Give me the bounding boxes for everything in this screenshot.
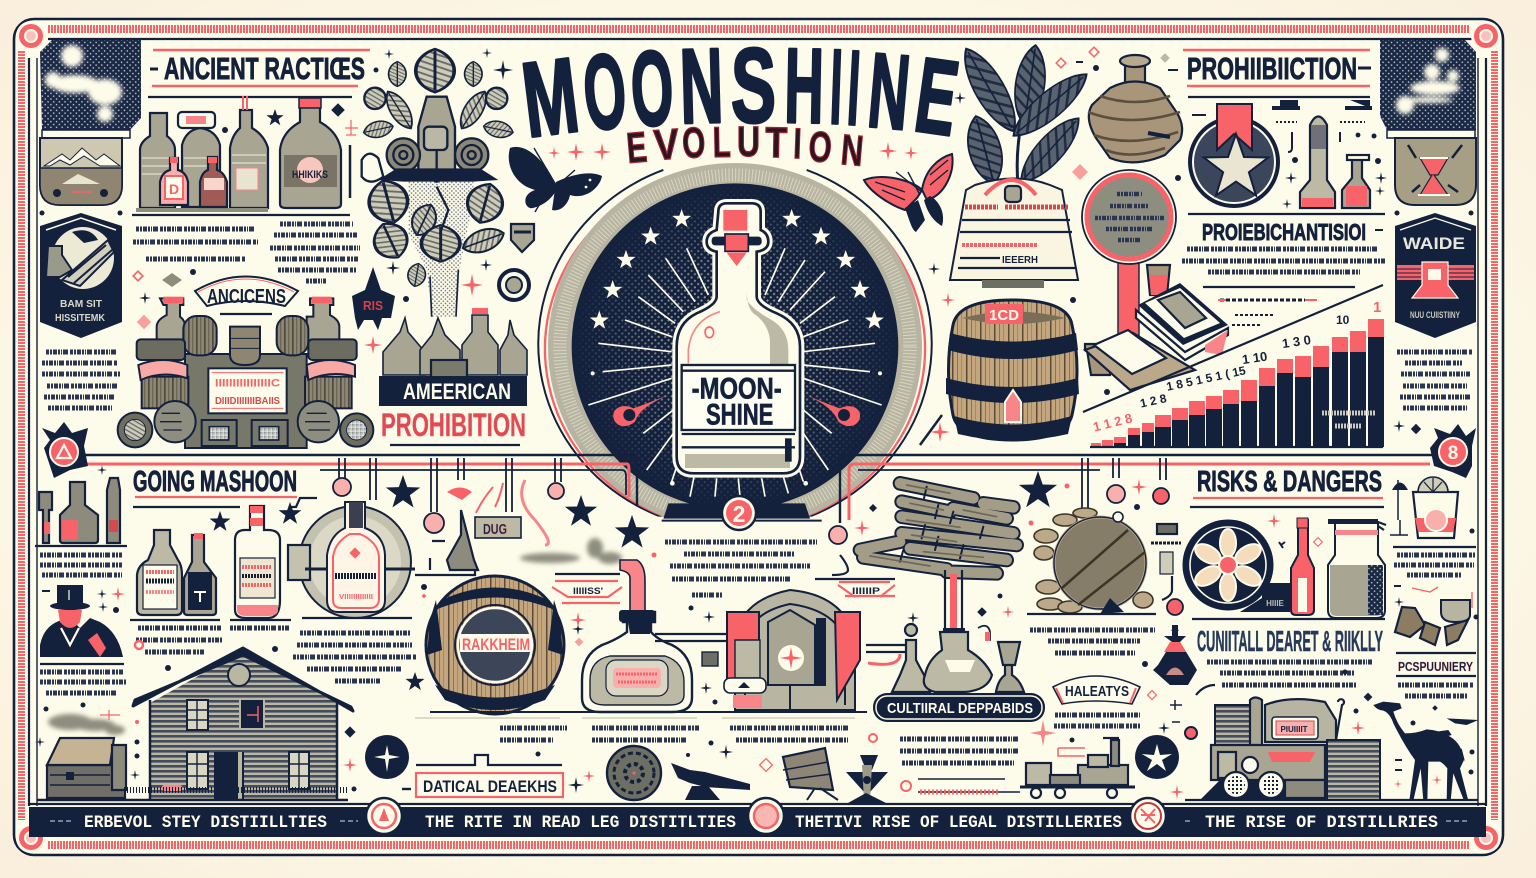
heading: Prohibition: PROHIIBIICTION	[1187, 51, 1357, 86]
banner label 2: THE RITE IN READ LEG DISTITLTIES	[425, 813, 736, 833]
text block: pcspuuniery	[1398, 685, 1474, 696]
panel: American label	[379, 376, 527, 406]
illustration: labelled bottles	[130, 506, 291, 620]
text block: cunhitall	[1207, 662, 1372, 685]
illustration: wooden barrel	[946, 300, 1079, 440]
subtitle: EVOLUTION: O	[681, 119, 706, 168]
text block: man	[40, 672, 126, 693]
text block: left column	[42, 352, 120, 408]
silhouette: camel	[1373, 702, 1478, 801]
bottom banner	[29, 798, 1486, 837]
barrel placard: DIIIDIIIIIIIBAIIS	[215, 396, 280, 407]
banner: Haleatys: HALEATYS	[1065, 683, 1129, 700]
corner ornament: bottom left	[16, 823, 46, 853]
small ornaments	[133, 48, 513, 354]
panel: top-left sky	[40, 40, 141, 205]
title: MOONSHINE: S	[731, 27, 776, 145]
illustration: American Prohibition: AMEERICAN	[403, 379, 511, 404]
illustration: cultural flasks	[892, 624, 1024, 692]
banner label 3: THETIVI RISE OF LEGAL DISTILLERIES	[795, 813, 1122, 833]
chips and cup	[1394, 586, 1478, 645]
icon: wagon wheel	[607, 746, 661, 800]
pipe pendants	[333, 458, 1183, 615]
bar chart	[1083, 285, 1384, 447]
sunburst rays	[588, 248, 882, 497]
chart value labels: 1 10	[1241, 349, 1268, 367]
medallion base	[662, 503, 822, 521]
chart value labels: 1 1 2 8	[1092, 410, 1134, 435]
heading: Ancient Practices: ANCIENT RACTIŒS	[164, 51, 365, 86]
butterfly right	[864, 154, 953, 232]
banner medallion 2	[748, 798, 784, 834]
title: MOONSHINE: O	[579, 32, 631, 153]
barrel placard: IIIIIIIIIIIIIIIIC	[215, 378, 280, 390]
pill: Cultural Deppabids: CULTIIRAL DEPPABIDS	[887, 700, 1033, 717]
coral comets	[613, 393, 860, 426]
heading: Risks and Dangers: RISKS & DANGERS	[1197, 466, 1382, 498]
illustration: American Prohibition	[379, 308, 527, 445]
illustration: distillery machine	[1185, 698, 1478, 800]
subtitle: EVOLUTION: V	[652, 120, 681, 170]
chart value labels: 1 3 0	[1281, 332, 1312, 351]
icon: bucket	[783, 748, 838, 800]
text block: centre	[665, 542, 817, 595]
subtitle: EVOLUTION: I	[793, 120, 802, 168]
dug sign	[475, 517, 521, 538]
small shield icon	[511, 224, 534, 252]
small label tag: middle	[815, 555, 895, 597]
icon: round star right	[1135, 735, 1179, 779]
text block: haleatys	[1054, 715, 1140, 726]
icon: cannon	[671, 763, 750, 800]
title: MOONSHINE: I	[828, 28, 844, 146]
ornaments: farmhouse	[35, 584, 427, 792]
banner: Ancicens	[195, 276, 298, 314]
small label tag: middle: IIIIIIP	[852, 586, 880, 596]
illustration: shack	[47, 738, 126, 798]
cocktail glass	[1390, 477, 1476, 547]
icon: funnel anvil	[846, 755, 888, 803]
trunk	[408, 180, 473, 317]
illustration: central still	[430, 590, 905, 712]
numbered marker 2: 2	[733, 501, 745, 527]
text block: going	[40, 555, 122, 575]
sign: document board	[950, 178, 1078, 288]
box: Datical Deaekhs	[402, 755, 563, 797]
still label: VIIIIIIIIIIIII	[339, 594, 373, 601]
subtitle: EVOLUTION: O	[807, 123, 833, 172]
illustration: books and cups	[1085, 265, 1228, 390]
numbered badge right	[1430, 424, 1476, 478]
illustration: distillery machine: PIUIIIIT	[1280, 725, 1308, 734]
subtitle: EVOLUTION: N	[839, 126, 865, 176]
text block: right column	[1397, 352, 1472, 408]
banner label 1: ERBEVOL STEY DISTIILLTIES	[84, 813, 327, 833]
illustration: barrels and still	[118, 297, 373, 448]
bottle label: HHIKIKS	[292, 169, 328, 181]
panel: top-right sky	[1380, 40, 1476, 205]
dug sign: DUG	[483, 521, 507, 538]
text block: cocktail	[1394, 555, 1475, 575]
corner ornament: top right	[1471, 21, 1501, 51]
heading: Ancient Practices	[148, 50, 378, 97]
small label tag: left flask	[552, 574, 622, 603]
title: MOONSHINE: N	[679, 27, 725, 146]
title: MOONSHINE: O	[628, 29, 676, 149]
ornaments: camel	[1142, 661, 1474, 799]
logs stack	[860, 483, 1017, 573]
barrel placard	[208, 368, 287, 413]
ornaments: man	[42, 465, 125, 613]
mason jar	[1192, 519, 1386, 619]
banner: Ancicens: ANCICENS	[207, 286, 286, 308]
illustration: barrel globe	[426, 576, 564, 714]
title: MOONSHINE: I	[845, 29, 863, 148]
icon: spade star with label: RIS	[363, 298, 383, 313]
wheel with flower	[1184, 521, 1290, 612]
chart value labels: 1	[1373, 299, 1381, 316]
badge: Waide shield: WAIDE	[1403, 234, 1465, 253]
title: MOONSHINE	[516, 27, 965, 160]
sign caption: IEEERH	[1002, 255, 1038, 266]
numbered marker 2	[722, 496, 756, 530]
text block: ancient practices	[133, 224, 360, 281]
label: Pcspuuniery	[1396, 653, 1476, 676]
chart value labels: 10	[1336, 313, 1350, 327]
subtitle: EVOLUTION: E	[625, 123, 649, 173]
figure: top-hat man	[40, 585, 124, 664]
wheel with flower: HIIIE	[1266, 599, 1285, 608]
chart value labels: 1 8 5 1 5 1 ( 15	[1165, 363, 1247, 394]
icon: round star left	[365, 735, 409, 779]
heading: Going Mashoon: GOING MASHOON	[133, 466, 297, 498]
illustration: American Prohibition: PROHIBITION	[381, 407, 526, 443]
chart value labels	[1092, 299, 1381, 435]
barrel tag	[985, 304, 1023, 324]
central medallion with bottle	[538, 170, 932, 530]
panel: hourglass	[1395, 138, 1476, 205]
target icon	[499, 270, 529, 300]
illustration: ancient bottles: D	[169, 181, 179, 197]
text block: labelled bottles	[136, 628, 290, 652]
title sparkles	[548, 142, 918, 161]
small label tag: left flask: IIIIISS'	[573, 586, 603, 596]
ribbon icon	[447, 488, 472, 500]
pill: Cultural Deppabids	[873, 693, 1045, 722]
banner: Haleatys	[1053, 676, 1140, 704]
text block: prohibition	[1182, 249, 1385, 272]
illustration: shelf bottles	[35, 478, 127, 546]
numbered badge right: 8	[1448, 443, 1458, 464]
corner ornament: top left	[16, 21, 46, 51]
pipe under logs	[943, 570, 965, 633]
magnifier seal	[1082, 170, 1176, 342]
apparatus: prohibition bottles	[1272, 100, 1387, 209]
illustration: botanical still tree	[362, 49, 515, 317]
chart value labels: 1 2 8	[1139, 391, 1168, 411]
illustration: ancient bottles	[132, 96, 358, 215]
text block: lower middle	[500, 728, 850, 740]
subtitle: EVOLUTION: L	[712, 119, 731, 167]
title: MOONSHINE: N	[864, 31, 914, 152]
banner medallion 1	[366, 798, 402, 834]
icon: spade star with label	[352, 267, 395, 330]
panel: mountains	[40, 138, 122, 205]
ornaments: around jar	[920, 47, 1206, 445]
subtitle: EVOLUTION: T	[765, 119, 788, 167]
lamp flask	[1153, 625, 1197, 685]
label: Pcspuuniery: PCSPUUNIERY	[1398, 659, 1473, 674]
subtitle: EVOLUTION	[625, 118, 865, 176]
ornaments: risks	[1028, 479, 1322, 548]
badge: left shield	[40, 210, 122, 338]
banner label 4: THE RISE OF DISTILLRIES	[1205, 813, 1438, 833]
apparatus: valve	[1151, 524, 1181, 600]
shield caption: BAM SIT	[60, 299, 102, 310]
illustration: wooden barrel: 1CD	[989, 307, 1019, 324]
illustration: clay jar	[1088, 55, 1182, 162]
numbered badge left	[42, 422, 88, 478]
main bottle	[677, 203, 800, 473]
illustration: round still with bottle	[288, 502, 415, 618]
stars	[590, 209, 884, 486]
illustration: farmhouse	[37, 648, 353, 800]
illustration: flask	[582, 560, 692, 712]
illustration: smoke	[48, 538, 622, 735]
badge: left shield: HISSITEMK	[55, 313, 106, 324]
illustration: plant	[954, 42, 1095, 190]
banner medallion 3	[1130, 798, 1166, 834]
title: MOONSHINE: M	[516, 36, 584, 160]
text block: still	[293, 633, 416, 681]
box: Datical Deaekhs: DATICAL DEAEKHS	[423, 777, 557, 796]
butterfly left	[509, 147, 602, 212]
subtitle: EVOLUTION: U	[737, 118, 760, 166]
heading: Proiebichantision: PROIEBICHANTISIOI	[1202, 219, 1366, 245]
bottle label text: -MOON-	[692, 372, 782, 405]
badge: Waide shield	[1394, 210, 1476, 338]
barrel label: RAKKHEIM	[462, 635, 530, 654]
medal: star	[1188, 104, 1280, 208]
corner ornament: bottom right	[1471, 823, 1501, 853]
text block: lower middle right	[900, 739, 1018, 763]
badge caption: NUU CUIISTIINY	[1410, 310, 1460, 321]
barrel lid with ropes	[1027, 508, 1156, 614]
text block: barrel	[1030, 630, 1155, 653]
main bottle: SHINE	[706, 398, 773, 431]
horizontal timeline pipe	[78, 455, 1440, 615]
illustration: small train	[1020, 720, 1135, 798]
ornaments: lower middle	[536, 504, 1020, 793]
title: MOONSHINE: E	[909, 36, 965, 158]
apparatus: pipe funnels and stars	[210, 471, 1057, 690]
hot sauce bottle	[1291, 518, 1314, 615]
title: MOONSHINE: H	[784, 27, 825, 146]
